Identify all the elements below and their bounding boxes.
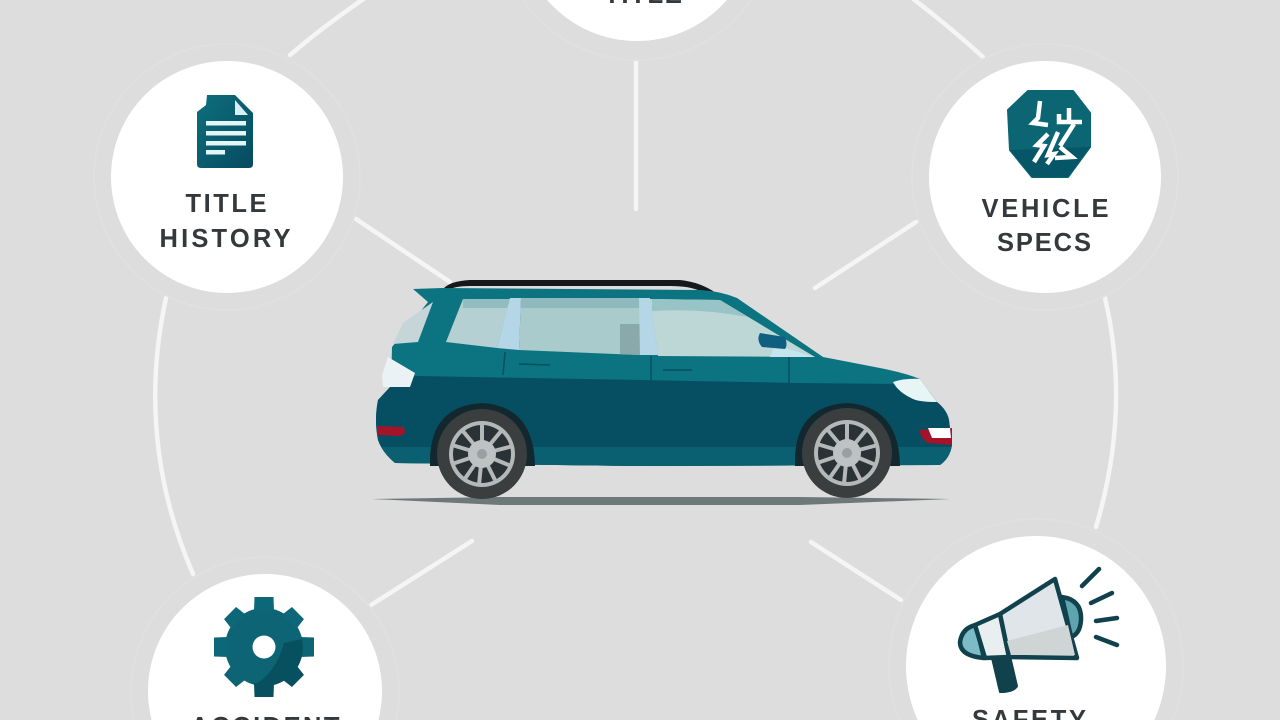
icon: gear [214,597,314,697]
headlight [893,379,937,402]
node: safety [889,519,1183,720]
icon: megaphone [960,569,1117,692]
rear marker [377,426,405,436]
tail light [382,357,415,387]
node: vehicle specs [912,44,1178,310]
car [360,270,970,505]
label: vehicle specs: SPECS [997,229,1091,257]
connector lines [155,0,1116,605]
ground shadow [372,497,950,505]
wheel arches [430,403,900,466]
label: title history: TITLE [186,190,266,218]
rear quarter glass [393,302,433,344]
rear wheel [437,409,527,499]
label: title history [160,190,290,253]
label: title history: HISTORY [160,225,290,253]
label: vehicle specs: VEHICLE [982,195,1108,223]
icon: octagon badge [1008,91,1090,177]
node: accident [131,557,399,720]
side windows [446,298,815,357]
node: title (top) [499,0,775,60]
label: vehicle specs [982,195,1108,257]
door seams and handles [503,352,789,384]
roof rack [443,280,716,293]
front wheel [802,408,892,498]
icon: document [197,95,253,168]
node: title history [94,44,360,310]
side mirror [758,333,786,349]
car body [376,288,952,466]
front bumper light [919,428,952,445]
